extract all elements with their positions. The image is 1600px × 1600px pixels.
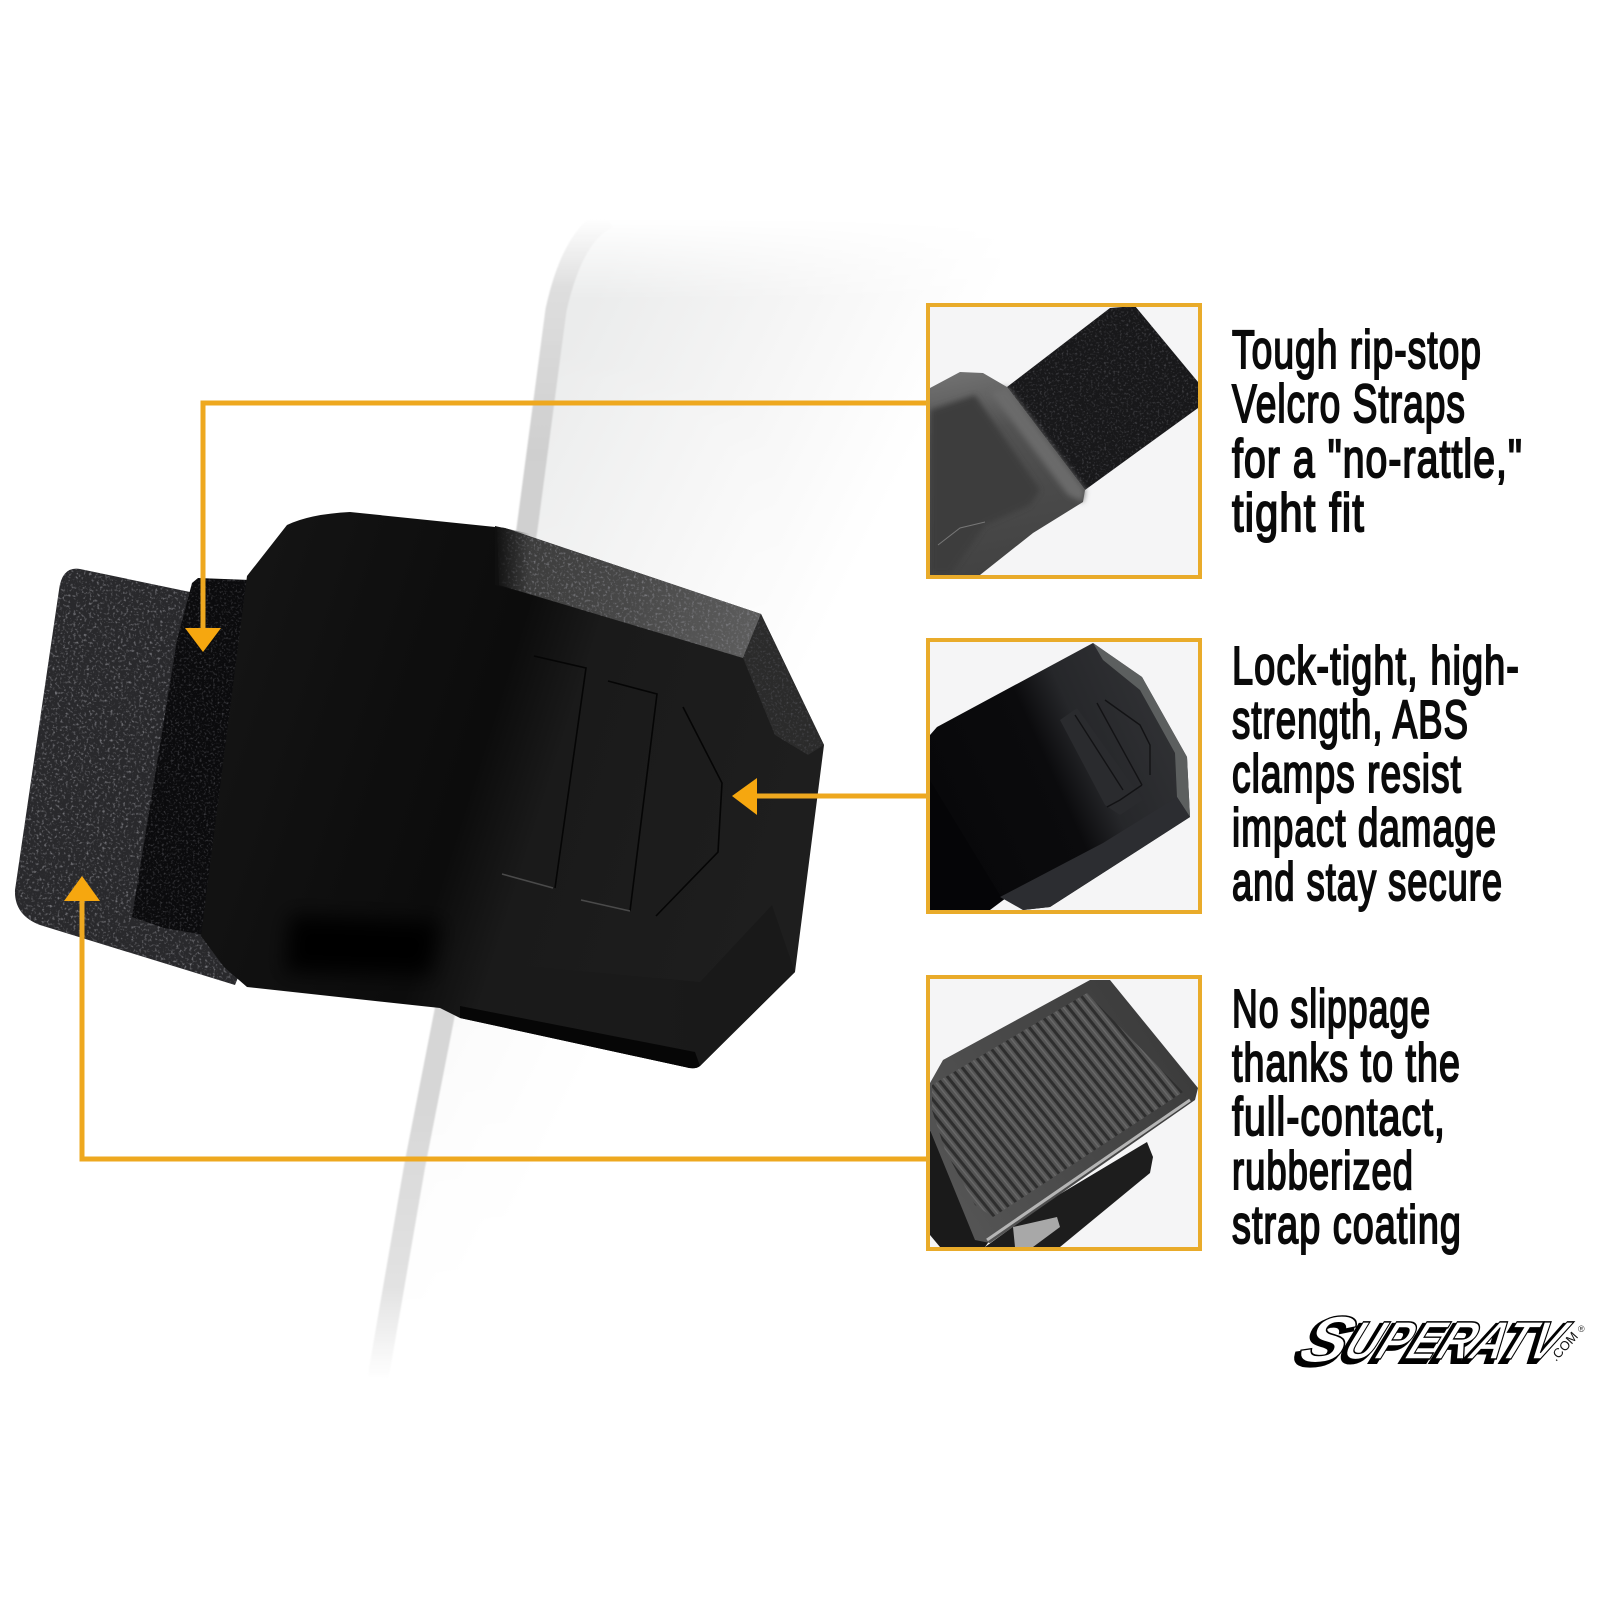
logo: SuperATV: .COM — [1547, 1329, 1581, 1364]
logo: SuperATV: S — [1285, 1305, 1364, 1379]
logo: SuperATV: S — [1289, 1302, 1368, 1376]
text: velcro strap description — [1232, 320, 1523, 543]
buckle and strap underside photo — [930, 1130, 1153, 1247]
text: velcro strap description: Tough rip-stop — [1232, 320, 1482, 380]
logo: SuperATV — [1285, 1302, 1585, 1379]
callout: top connector arrow to velcro strap — [185, 403, 926, 652]
text: ABS clamp description: strength, ABS — [1232, 690, 1469, 750]
right bevel — [743, 614, 824, 755]
text: rubberized strap description: rubberized — [1232, 1141, 1414, 1201]
clamp body — [201, 512, 824, 1068]
panel: rubberized strap coating detail — [928, 977, 1200, 1249]
ribbed pad photo — [930, 980, 1198, 1243]
callout: middle connector arrow to clamp — [732, 778, 926, 815]
main photo: window clamp on windshield — [14, 235, 830, 1354]
text: velcro strap description: tight fit — [1232, 483, 1365, 543]
logo: SuperATV: ® — [1578, 1324, 1585, 1334]
text: rubberized strap description: full-contact, — [1232, 1087, 1446, 1147]
clamp photo — [930, 372, 1085, 575]
panel: ABS clamp detail — [928, 640, 1200, 912]
lower dark shadow band — [285, 915, 440, 975]
windshield pane — [373, 235, 830, 1354]
text: rubberized strap description: thanks to the — [1232, 1033, 1461, 1093]
velcro strap outer pad — [15, 569, 245, 985]
clamp photo — [930, 643, 1190, 910]
callout: bottom connector arrow to strap pad — [64, 876, 926, 1159]
text: rubberized strap description — [1232, 979, 1462, 1255]
lower facet shading — [460, 905, 795, 1067]
text: velcro strap description: Velcro Straps — [1232, 374, 1466, 434]
panel: velcro strap detail — [928, 305, 1200, 577]
text: ABS clamp description: clamps resist — [1232, 744, 1462, 804]
strap shadow photo — [930, 780, 1004, 910]
top bevel textured highlight — [497, 527, 761, 658]
text: rubberized strap description: No slippage — [1232, 979, 1431, 1039]
velcro strap photo — [1007, 306, 1198, 490]
lower edge flange — [460, 1006, 700, 1068]
text: rubberized strap description: strap coating — [1232, 1195, 1462, 1255]
text: ABS clamp description — [1232, 636, 1520, 912]
brand mark engraved lines — [534, 656, 722, 916]
velcro strap inner loop — [132, 578, 250, 935]
